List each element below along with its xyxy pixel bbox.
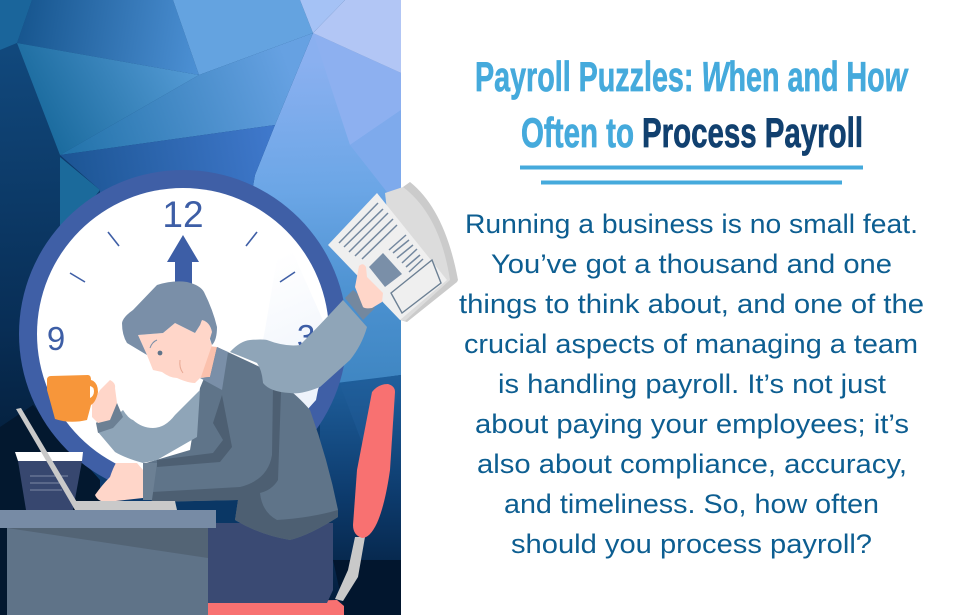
- icon: chair: [208, 384, 395, 615]
- title: [475, 53, 909, 156]
- title line 1: Payroll Puzzles: When and How: [475, 53, 909, 100]
- jacket chest shading: [157, 395, 232, 467]
- desk: [0, 510, 216, 615]
- hair: [122, 281, 217, 355]
- face: [138, 322, 212, 383]
- title underlines: [520, 166, 863, 184]
- jacket torso: [146, 347, 338, 540]
- jacket back fold: [152, 386, 338, 540]
- clock number 9: 9: [47, 320, 65, 357]
- body text: is handling payroll. It’s not just: [498, 369, 887, 399]
- clock ticks: [70, 232, 295, 282]
- dark shadow under desk: [170, 500, 245, 540]
- icon: newspaper: [328, 182, 458, 322]
- panel: illustration: [0, 0, 458, 615]
- icon: coffee mug: [47, 375, 98, 422]
- raised right arm: [230, 300, 367, 393]
- title line 2 dark: Process Payroll: [642, 109, 863, 156]
- clock number 3: 3: [297, 318, 315, 355]
- body text: things to think about, and one of the: [459, 289, 924, 319]
- body text: Running a business is no small feat.: [465, 209, 918, 239]
- neck: [198, 345, 217, 378]
- icon: laptop: [16, 408, 177, 510]
- body text: also about compliance, accuracy,: [477, 449, 907, 479]
- collar: [200, 347, 228, 390]
- polygon background: [0, 0, 401, 615]
- body text: crucial aspects of managing a team: [464, 329, 918, 359]
- person: [47, 182, 458, 540]
- clock number 12: 12: [162, 194, 204, 235]
- raised sleeve cuff: [345, 290, 375, 320]
- clock hand arrow: [167, 235, 199, 292]
- cup of papers: [15, 452, 83, 510]
- ear: [200, 320, 212, 345]
- mug arm sleeve: [98, 390, 200, 463]
- typing hand: [95, 463, 143, 502]
- typing sleeve cuff: [143, 463, 157, 500]
- raised hand: [355, 264, 383, 308]
- mug arm cuff: [96, 403, 123, 433]
- trousers: [208, 523, 333, 603]
- body text: and timeliness. So, how often: [504, 489, 879, 519]
- body text: You’ve got a thousand and one: [491, 249, 892, 279]
- body text: should you process payroll?: [511, 529, 872, 559]
- body text: about paying your employees; it’s: [475, 409, 909, 439]
- clock: [19, 170, 347, 498]
- title line 2 light: Often to: [521, 109, 634, 156]
- clock face shading: [250, 228, 329, 440]
- mug hand: [92, 380, 117, 423]
- body text: [459, 209, 924, 559]
- eye and brow: [150, 340, 183, 373]
